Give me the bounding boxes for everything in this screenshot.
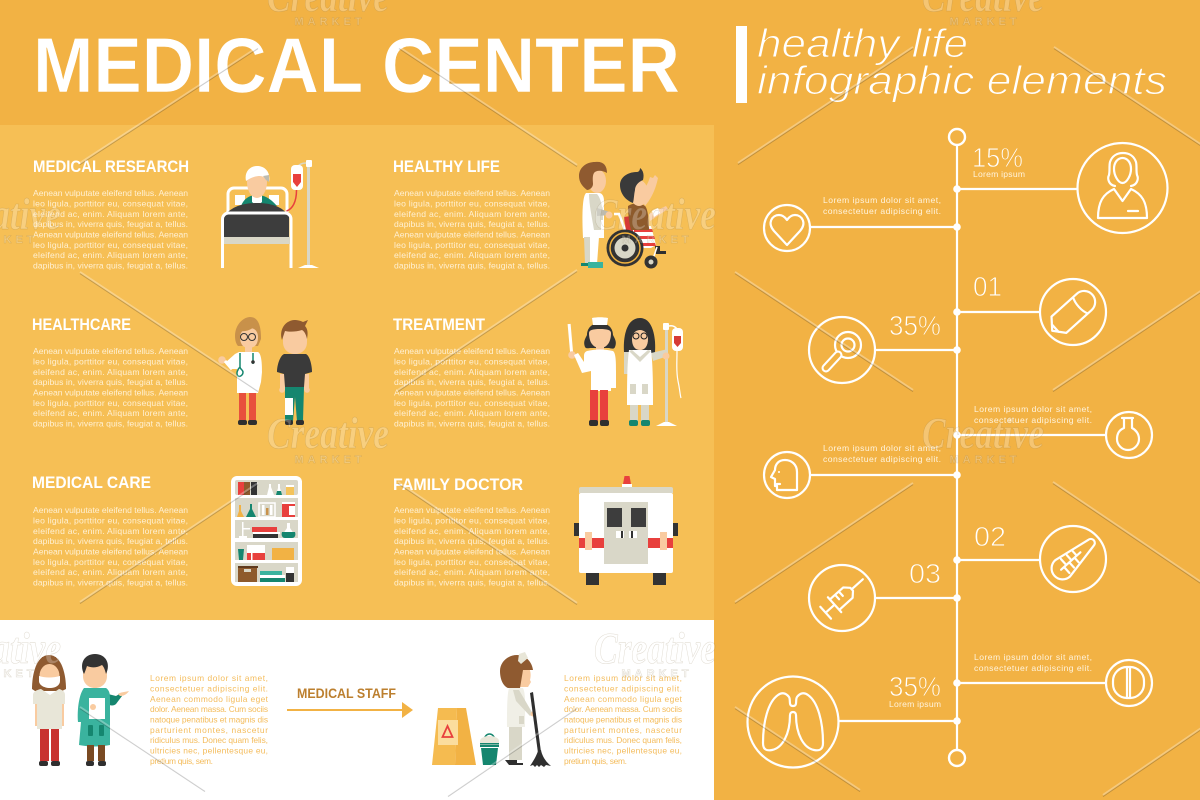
timeline item: 15% woman: Lorem ipsum (973, 169, 1025, 179)
timeline item: 15% woman: 15% (972, 142, 1023, 173)
arrow (287, 702, 413, 718)
timeline item: pill: Lorem ipsum dolor sit amet, (974, 652, 1092, 662)
section: family doctor text: leo ligula, porttitor eu, consequat vitae, (394, 557, 550, 567)
section: healthy life text: Aenean vulputate eleifend tellus. Aenean (394, 188, 550, 198)
timeline item: flask: Lorem ipsum dolor sit amet, (974, 404, 1092, 414)
section: medical research text: dapibus in, viverra quis, feugiat a, tellus. (33, 260, 188, 270)
section: medical research text: leo ligula, porttitor eu, consequat vitae, (33, 240, 188, 250)
subtitle: infographic elements (757, 59, 1167, 103)
illustration: medicine cabinet (231, 476, 302, 586)
timeline item: 35% magnifier (809, 310, 961, 383)
section: healthy life text (393, 158, 550, 270)
illustration: cleaner with mop (500, 652, 551, 767)
text: staff description right: ridiculus mus. Donec quam felis, (564, 735, 682, 745)
timeline item: head: Lorem ipsum dolor sit amet, (823, 443, 941, 453)
timeline item: heart: consectetuer adipiscing elit. (823, 206, 941, 216)
watermark text: Creative (594, 624, 716, 673)
section: medical research text: Aenean vulputate eleifend tellus. Aenean (33, 188, 188, 198)
heading: medical staff: MEDICAL STAFF (297, 686, 396, 701)
section: treatment text: dapibus in, viverra quis, feugiat a, tellus. (394, 377, 550, 387)
watermark text: Creative (267, 409, 389, 458)
title: MEDICAL CENTER (33, 21, 680, 109)
section: healthy life text: Aenean vulputate eleifend tellus. Aenean (394, 230, 550, 240)
timeline item: 02 thermometer: 02 (974, 521, 1006, 552)
text: staff description left: Lorem ipsum dolor sit amet, (150, 673, 268, 683)
section: medical care text: dapibus in, viverra quis, feugiat a, tellus. (33, 536, 188, 546)
timeline item: pill: consectetuer adipiscing elit. (974, 663, 1092, 673)
illustration: ambulance rear view (574, 476, 678, 585)
timeline item: heart: Lorem ipsum dolor sit amet, (823, 195, 941, 205)
timeline item: head (764, 443, 961, 498)
subtitle (736, 22, 1167, 103)
text: staff description left: parturient montes, nascetur (150, 725, 268, 735)
section: family doctor text: dapibus in, viverra quis, feugiat a, tellus. (394, 578, 550, 588)
panel: medical services (0, 125, 714, 620)
panel: medical staff (0, 620, 714, 800)
section: healthy life text: eleifend ac, enim. Aliquam lorem ante, (394, 250, 550, 260)
text: staff description left: dolor. Aenean massa. Cum sociis (150, 704, 268, 714)
section: medical care text: Aenean vulputate eleifend tellus. Aenean (33, 505, 188, 515)
timeline item: 01 pencil: 01 (973, 271, 1002, 302)
section: treatment text: Aenean vulputate eleifend tellus. Aenean (394, 388, 550, 398)
watermark text: MARKET (950, 454, 1017, 466)
section: family doctor text: leo ligula, porttitor eu, consequat vitae, (394, 516, 550, 526)
section: healthcare text: HEALTHCARE (32, 316, 131, 334)
section: healthcare text: Aenean vulputate eleifend tellus. Aenean (33, 346, 188, 356)
text: staff description right: pretium quis, sem. (564, 756, 627, 766)
section: healthy life text: dapibus in, viverra quis, feugiat a, tellus. (394, 219, 550, 229)
text: staff description right: ultricies nec, pellentesque eu, (564, 746, 682, 756)
text: staff description right: natoque penatibus et magnis dis (564, 714, 682, 724)
text: staff description left: Aenean commodo ligula eget (150, 694, 269, 704)
section: medical care text (32, 474, 188, 588)
section: medical research text: leo ligula, porttitor eu, consequat vitae, (33, 198, 188, 208)
section: medical research text: MEDICAL RESEARCH (33, 158, 189, 176)
section: treatment text: eleifend ac, enim. Aliquam lorem ante, (394, 367, 550, 377)
timeline item: head: consectetuer adipiscing elit. (823, 454, 941, 464)
illustration: masked nurse and doctor with clipboard (32, 654, 129, 766)
section: medical research text: eleifend ac, enim. Aliquam lorem ante, (33, 250, 188, 260)
section: medical care text: Aenean vulputate eleifend tellus. Aenean (33, 546, 188, 556)
text: staff description left: consectetuer adipiscing elit. (150, 684, 268, 694)
section: treatment text (393, 316, 550, 428)
timeline item: flask: consectetuer adipiscing elit. (974, 415, 1092, 425)
section: family doctor text (393, 476, 550, 588)
section: medical research text: eleifend ac, enim. Aliquam lorem ante, (33, 209, 188, 219)
section: healthcare text: leo ligula, porttitor eu, consequat vitae, (33, 398, 188, 408)
timeline item: pill (953, 652, 1152, 706)
timeline item: 35% lungs: Lorem ipsum (889, 699, 941, 709)
illustration: caution sign and bucket (432, 708, 499, 765)
section: family doctor text: dapibus in, viverra quis, feugiat a, tellus. (394, 536, 550, 546)
section: healthy life text: dapibus in, viverra quis, feugiat a, tellus. (394, 260, 550, 270)
section: family doctor text: eleifend ac, enim. Aliquam lorem ante, (394, 567, 550, 577)
section: family doctor text: eleifend ac, enim. Aliquam lorem ante, (394, 526, 550, 536)
section: family doctor text: Aenean vulputate eleifend tellus. Aenean (394, 505, 550, 515)
section: healthcare text: dapibus in, viverra quis, feugiat a, tellus. (33, 418, 188, 428)
text: staff description right: parturient montes, nascetur (564, 725, 682, 735)
text: staff description left: pretium quis, sem. (150, 756, 213, 766)
subtitle: healthy life (757, 22, 968, 66)
section: healthcare text: Aenean vulputate eleifend tellus. Aenean (33, 388, 188, 398)
section: healthcare text: leo ligula, porttitor eu, consequat vitae, (33, 356, 188, 366)
text: staff description left: ultricies nec, pellentesque eu, (150, 746, 268, 756)
illustration: doctor pushing wheelchair patient (579, 162, 668, 268)
section: family doctor text: FAMILY DOCTOR (393, 476, 523, 494)
section: medical care text: leo ligula, porttitor eu, consequat vitae, (33, 516, 188, 526)
watermark text: MARKET (294, 16, 362, 28)
text: staff description right: dolor. Aenean massa. Cum sociis (564, 704, 682, 714)
text: staff description left: ridiculus mus. Donec quam felis, (150, 735, 268, 745)
watermark text: Creative (594, 190, 716, 239)
text: staff description left (150, 673, 269, 766)
section: medical care text: eleifend ac, enim. Aliquam lorem ante, (33, 567, 188, 577)
illustration: doctor and injured boy (218, 317, 312, 425)
section: medical research text: dapibus in, viverra quis, feugiat a, tellus. (33, 219, 188, 229)
section: medical care text: leo ligula, porttitor eu, consequat vitae, (33, 557, 188, 567)
section: healthy life text: eleifend ac, enim. Aliquam lorem ante, (394, 209, 550, 219)
section: healthcare text: eleifend ac, enim. Aliquam lorem ante, (33, 367, 188, 377)
text: staff description right: Lorem ipsum dolor sit amet, (564, 673, 682, 683)
section: healthcare text (32, 316, 188, 428)
timeline spine (949, 129, 965, 766)
watermark text: MARKET (294, 454, 362, 466)
timeline item: heart (764, 195, 961, 251)
section: treatment text: TREATMENT (393, 316, 485, 334)
section: healthy life text: HEALTHY LIFE (393, 158, 500, 176)
watermark text: MARKET (950, 16, 1017, 28)
timeline item: 15% woman (953, 142, 1168, 233)
timeline item: 03 syringe (809, 558, 961, 631)
section: medical research text (33, 158, 189, 270)
section: medical care text: MEDICAL CARE (32, 474, 151, 492)
watermark text: MARKET (622, 234, 689, 246)
section: treatment text: leo ligula, porttitor eu, consequat vitae, (394, 398, 550, 408)
timeline item: 35% magnifier: 35% (889, 310, 941, 341)
section: treatment text: dapibus in, viverra quis, feugiat a, tellus. (394, 418, 550, 428)
watermark text (0, 0, 1044, 680)
section: healthcare text: eleifend ac, enim. Aliquam lorem ante, (33, 408, 188, 418)
section: treatment text: eleifend ac, enim. Aliquam lorem ante, (394, 408, 550, 418)
text: staff description right: consectetuer adipiscing elit. (564, 684, 682, 694)
watermark text: Creative (922, 409, 1044, 458)
illustration: patient in bed with IV (222, 160, 319, 268)
section: healthy life text: leo ligula, porttitor eu, consequat vitae, (394, 240, 550, 250)
section: healthcare text: dapibus in, viverra quis, feugiat a, tellus. (33, 377, 188, 387)
section: family doctor text: Aenean vulputate eleifend tellus. Aenean (394, 546, 550, 556)
section: medical care text: eleifend ac, enim. Aliquam lorem ante, (33, 526, 188, 536)
section: treatment text: leo ligula, porttitor eu, consequat vitae, (394, 356, 550, 366)
text: staff description right: Aenean commodo ligula eget (564, 694, 683, 704)
illustration: nurse and doctor with IV stand (568, 317, 683, 426)
timeline item: 01 pencil (953, 271, 1106, 345)
section: treatment text: Aenean vulputate eleifend tellus. Aenean (394, 346, 550, 356)
section: healthy life text: leo ligula, porttitor eu, consequat vitae, (394, 198, 550, 208)
timeline item: flask (953, 404, 1152, 458)
timeline item: 03 syringe: 03 (909, 558, 941, 589)
section: medical research text: Aenean vulputate eleifend tellus. Aenean (33, 230, 188, 240)
timeline item: 35% lungs (748, 671, 961, 768)
text: staff description right (564, 673, 683, 766)
watermark text: MARKET (622, 668, 689, 680)
timeline item: 35% lungs: 35% (889, 671, 941, 702)
text: staff description left: natoque penatibus et magnis dis (150, 714, 268, 724)
timeline item: 02 thermometer (953, 521, 1106, 592)
section: medical care text: dapibus in, viverra quis, feugiat a, tellus. (33, 578, 188, 588)
